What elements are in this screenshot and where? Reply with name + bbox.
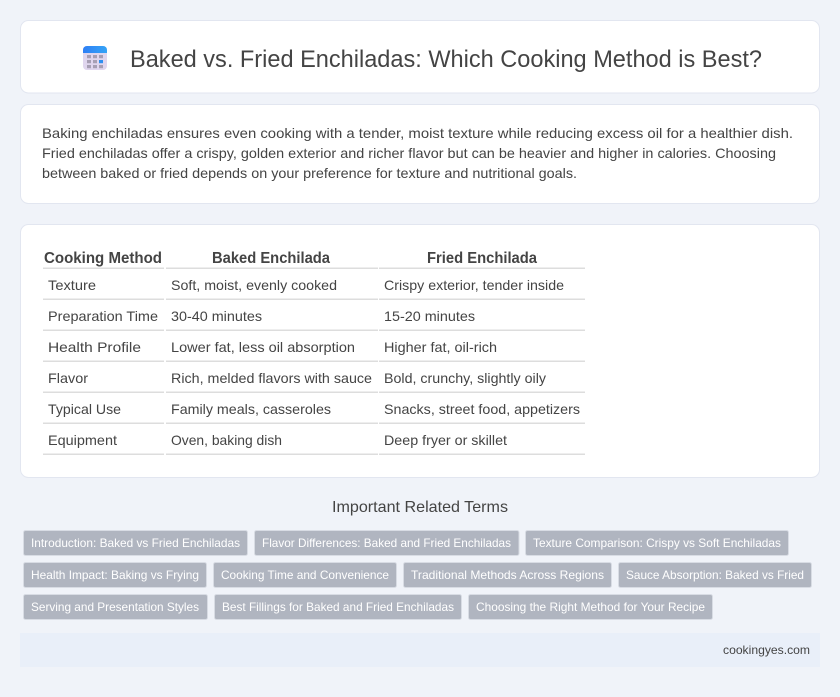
row: typical use: Family meals, casseroles xyxy=(171,401,331,417)
row: preparation time: Preparation Time xyxy=(48,308,158,324)
row: preparation time: 15-20 minutes xyxy=(384,308,475,324)
heading: important related terms: Important Related Terms xyxy=(332,499,508,516)
row: equipment xyxy=(48,432,507,448)
tag: serving styles xyxy=(24,594,208,620)
row: health profile: Higher fat, oil-rich xyxy=(384,339,497,355)
intro paragraph: Baking enchiladas ensures even cooking with a tender, moist texture while reducing excess oil for a healthier dish. xyxy=(42,125,793,141)
tag: cooking time: Cooking Time and Convenience xyxy=(221,568,389,582)
table header row: Baked Enchilada xyxy=(212,250,330,267)
panel: comparison table xyxy=(20,224,820,478)
tag: choosing method xyxy=(468,594,712,620)
tag: flavor differences: Flavor Differences: Baked and Fried Enchiladas xyxy=(262,536,511,550)
tag: health impact: Health Impact: Baking vs Frying xyxy=(31,568,199,582)
row: equipment: Equipment xyxy=(48,432,117,448)
intro paragraph: Fried enchiladas offer a crispy, golden exterior and richer flavor but can be heavier and higher in calories. Choosing xyxy=(42,145,776,161)
footer: cookingyes.com xyxy=(723,643,810,657)
row: equipment: Deep fryer or skillet xyxy=(384,432,507,448)
tag: introduction xyxy=(24,530,248,556)
tag: flavor differences xyxy=(254,530,519,556)
icon: calendar xyxy=(83,46,107,70)
row: flavor: Bold, crunchy, slightly oily xyxy=(384,370,546,386)
intro paragraph: between baked or fried depends on your preference for texture and nutritional goals. xyxy=(42,165,577,181)
related term tags xyxy=(24,530,812,620)
row: typical use xyxy=(48,401,580,417)
tag: traditional methods: Traditional Methods Across Regions xyxy=(411,568,604,582)
row: flavor xyxy=(48,370,546,386)
row: texture: Crispy exterior, tender inside xyxy=(384,277,564,293)
row: health profile: Lower fat, less oil absorption xyxy=(171,339,355,355)
tag: sauce absorption: Sauce Absorption: Baked vs Fried xyxy=(626,568,804,582)
tag: best fillings xyxy=(214,594,462,620)
panel: introduction xyxy=(20,104,820,204)
row: flavor: Rich, melded flavors with sauce xyxy=(171,370,372,386)
title: Baked vs. Fried Enchiladas: Which Cooking Method is Best? xyxy=(130,46,762,73)
row: texture: Texture xyxy=(48,277,96,293)
row: typical use: Snacks, street food, appetizers xyxy=(384,401,580,417)
table header row xyxy=(44,250,537,267)
tag: best fillings: Best Fillings for Baked and Fried Enchiladas xyxy=(222,600,454,614)
tag: health impact xyxy=(24,562,206,588)
intro paragraph xyxy=(42,125,793,181)
tag: serving styles: Serving and Presentation Styles xyxy=(31,600,199,614)
tag: sauce absorption xyxy=(618,562,812,588)
row: typical use: Typical Use xyxy=(48,401,121,417)
tag: choosing method: Choosing the Right Method for Your Recipe xyxy=(476,600,705,614)
row: preparation time xyxy=(48,308,475,324)
row: flavor: Flavor xyxy=(48,370,88,386)
tag: introduction: Introduction: Baked vs Fried Enchiladas xyxy=(31,536,240,550)
row: health profile: Health Profile xyxy=(48,339,141,355)
row: equipment: Oven, baking dish xyxy=(171,432,282,448)
row: preparation time: 30-40 minutes xyxy=(171,308,262,324)
panel: header xyxy=(20,20,820,93)
footer xyxy=(20,633,820,667)
tag: texture comparison xyxy=(526,530,788,556)
row: texture xyxy=(48,277,564,293)
tag: traditional methods xyxy=(404,562,612,588)
table header row: Fried Enchilada xyxy=(427,250,537,267)
table header row: Cooking Method xyxy=(44,250,162,267)
tag: texture comparison: Texture Comparison: Crispy vs Soft Enchiladas xyxy=(533,536,781,550)
row: texture: Soft, moist, evenly cooked xyxy=(171,277,337,293)
tag: cooking time xyxy=(214,562,396,588)
row: health profile xyxy=(48,339,497,355)
